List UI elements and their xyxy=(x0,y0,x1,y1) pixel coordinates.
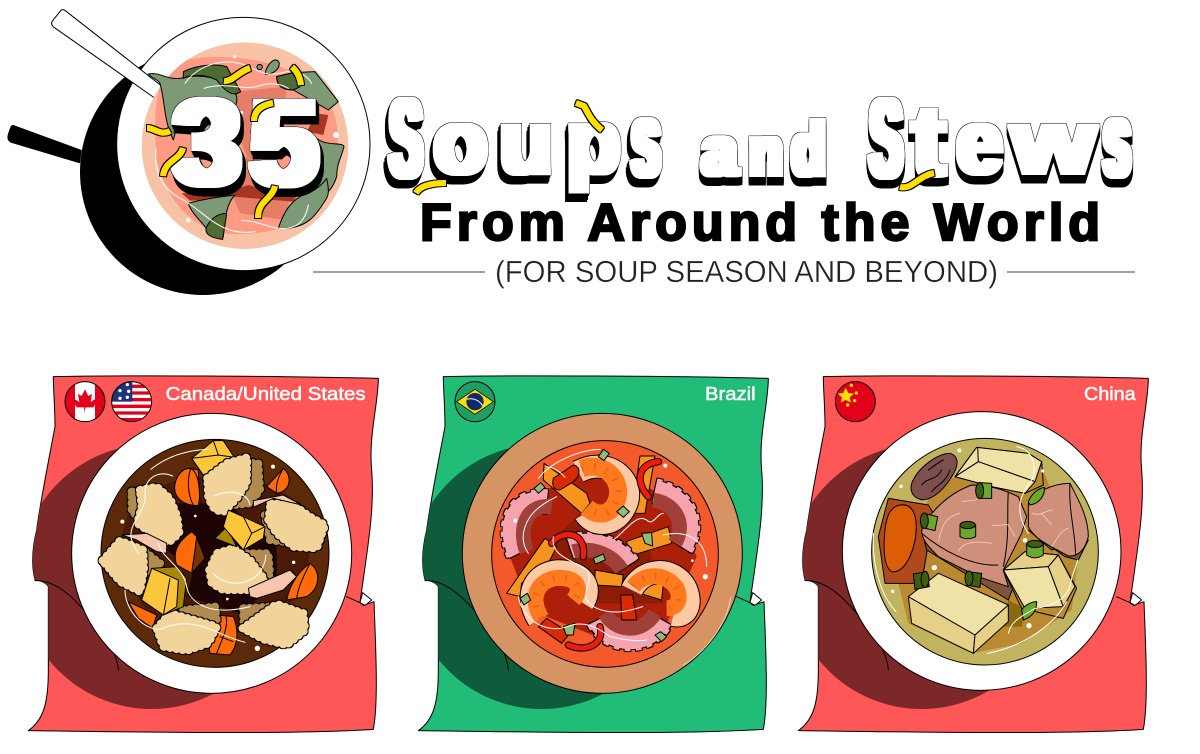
pork slice right xyxy=(1028,483,1088,560)
clay bowl xyxy=(462,413,742,693)
word: Stews: S xyxy=(870,76,902,201)
yellow noodle ribbons over the bowl xyxy=(147,67,301,218)
soup surface xyxy=(142,42,348,249)
word: Soups: o xyxy=(434,93,487,193)
bowl shadow xyxy=(422,448,604,709)
tofu top xyxy=(955,447,1043,493)
panel: Canada / United States xyxy=(19,376,378,733)
octopus tentacles xyxy=(513,491,688,639)
spring onion pieces xyxy=(913,483,1044,620)
white bowl xyxy=(117,17,370,271)
red date xyxy=(911,453,957,500)
dumpling dark undersides xyxy=(132,462,283,622)
brick of pumpkin xyxy=(878,498,933,583)
white bowl xyxy=(72,413,352,693)
carrot pieces xyxy=(128,468,318,655)
word: Soups: S xyxy=(390,76,422,201)
word: and: d xyxy=(792,107,825,192)
red cloth xyxy=(28,376,378,733)
label: Brazil xyxy=(705,383,756,404)
title line two: From Around the World xyxy=(420,194,1100,252)
tofu bottom xyxy=(908,573,1008,653)
orange pepper wedges xyxy=(507,456,672,600)
fat droplets xyxy=(891,448,1044,628)
big number 35: 3 xyxy=(173,74,241,210)
potato cube top xyxy=(192,441,234,477)
broth highlights xyxy=(873,447,1078,653)
panel: China xyxy=(789,376,1148,733)
dumplings xyxy=(103,457,325,651)
potato cube left xyxy=(142,567,187,615)
shrimp lower left xyxy=(531,571,587,620)
green herb leaves xyxy=(148,60,344,239)
flag: China xyxy=(835,382,875,422)
moqueca broth xyxy=(492,441,718,667)
broth xyxy=(872,438,1098,665)
bacon strips xyxy=(122,495,302,598)
frying pan silhouette xyxy=(7,49,326,295)
green cloth xyxy=(418,376,768,733)
pork slice large xyxy=(922,485,1027,600)
broth highlights xyxy=(125,449,266,642)
word: Soups: u xyxy=(500,93,552,193)
soup swirl highlights xyxy=(156,62,312,232)
potato cube centre xyxy=(215,510,265,550)
green herb bits xyxy=(520,449,667,642)
panel: Brazil xyxy=(409,376,768,733)
white bowl xyxy=(842,412,1121,690)
label: China xyxy=(1084,383,1136,404)
fat droplets xyxy=(120,465,295,651)
flag: United States xyxy=(112,382,152,422)
subtitle: (FOR SOUP SEASON AND BEYOND) xyxy=(495,254,998,289)
fat droplets xyxy=(513,464,708,579)
word: Soups: p xyxy=(567,93,620,193)
meat grain xyxy=(938,498,1068,552)
word: Stews: w xyxy=(1011,93,1096,193)
word: and: a xyxy=(702,112,738,190)
flag: Canada xyxy=(65,382,105,422)
title line one: Soups and Stews xyxy=(390,76,1130,201)
header bowl illustration xyxy=(7,10,370,295)
word: Stews: t xyxy=(912,85,945,197)
cloth folds xyxy=(425,581,750,670)
flag: Brazil xyxy=(455,382,495,422)
bowl shadow xyxy=(802,449,989,709)
big number 35: 5 xyxy=(250,75,318,211)
word: and: n xyxy=(750,112,782,190)
tofu right xyxy=(1003,552,1077,618)
word: Stews: e xyxy=(957,93,1002,193)
big number 35 xyxy=(173,74,318,211)
spoon handle xyxy=(52,10,163,98)
word: and xyxy=(702,107,825,192)
broth highlights xyxy=(518,449,731,665)
word: Soups xyxy=(390,76,660,201)
shrimp lower right xyxy=(632,572,689,615)
red pepper rings xyxy=(552,462,658,648)
bowl shadow xyxy=(32,448,214,709)
shrimp top xyxy=(531,467,689,620)
sliced red pepper chunks xyxy=(538,465,637,643)
stew broth xyxy=(101,439,329,667)
cloth folds xyxy=(805,581,1130,670)
cloth folds xyxy=(35,581,360,670)
infographic canvas: s xyxy=(1104,81,1130,199)
label: Canada/United States xyxy=(166,383,366,404)
title line one: Soups and Stews: s xyxy=(632,81,660,199)
word: Stews xyxy=(870,76,1130,201)
red cloth xyxy=(798,376,1148,733)
noodle ribbons over the title xyxy=(416,103,934,193)
